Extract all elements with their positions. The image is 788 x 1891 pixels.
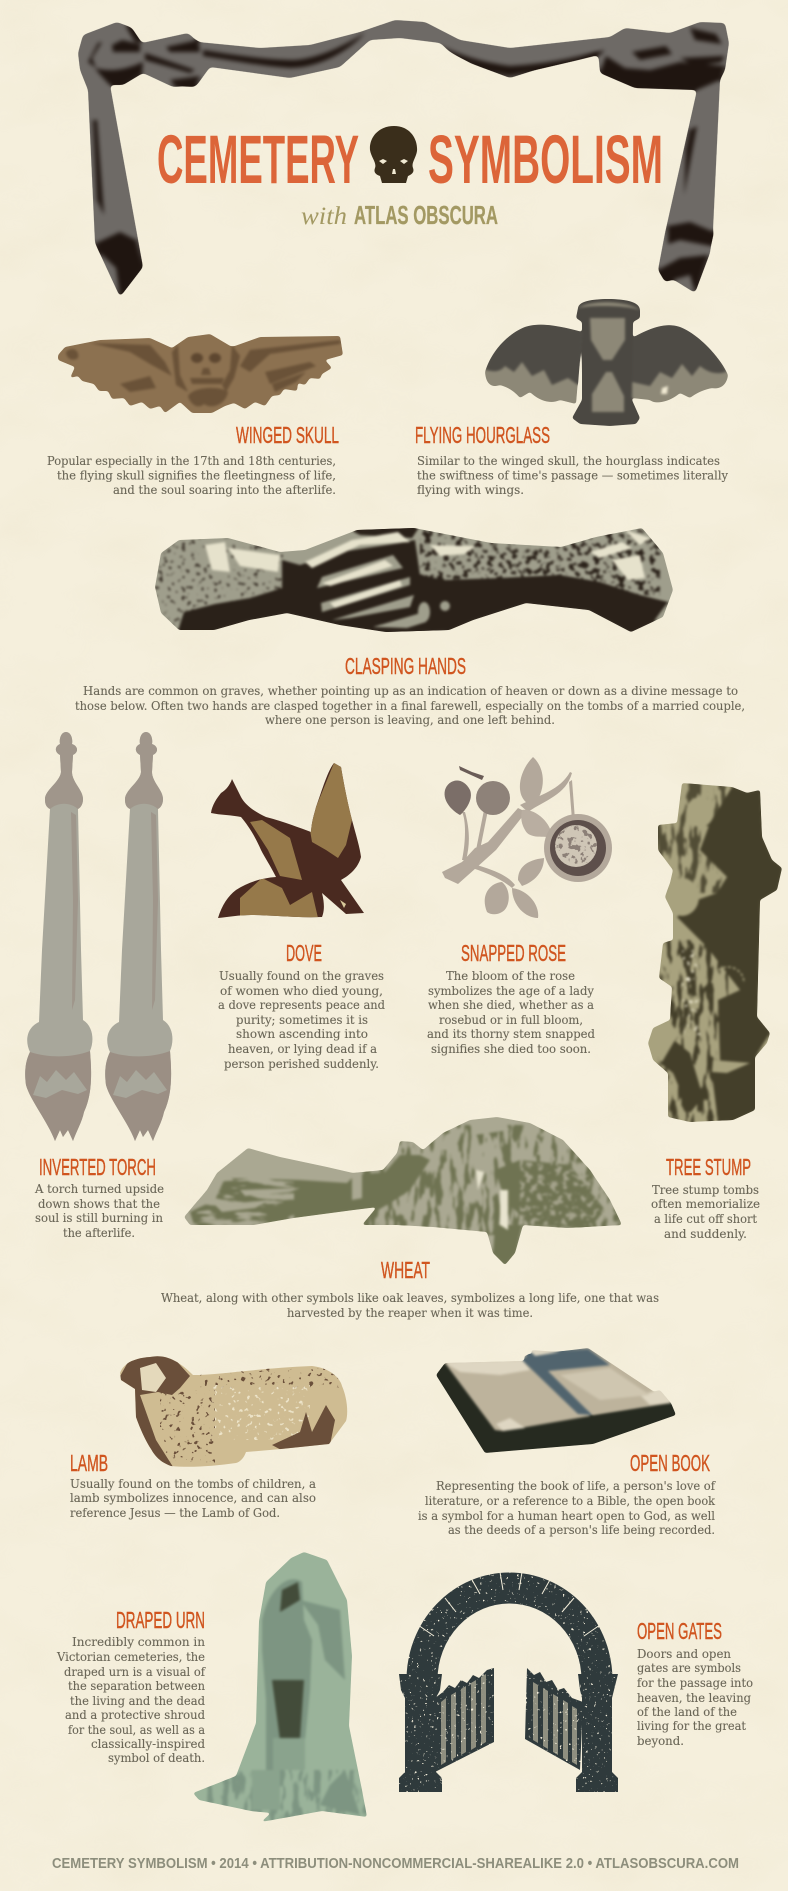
description: beyond. — [637, 1734, 684, 1748]
description: heaven, or lying dead if a — [228, 1042, 377, 1056]
description: Wheat, along with other symbols like oak leaves, symbolizes a long life, one that was — [161, 1291, 659, 1305]
panel: tree stump — [645, 780, 785, 1241]
description: purity; sometimes it is — [236, 1013, 368, 1027]
description: person perished suddenly. — [224, 1057, 379, 1071]
description: and the soul soaring into the afterlife. — [113, 483, 336, 497]
heading: OPEN GATES — [637, 1618, 722, 1644]
panel: lamb — [70, 1350, 350, 1520]
icon: winged skull — [58, 334, 343, 413]
heading: FLYING HOURGLASS — [415, 422, 550, 448]
description: heaven, the leaving — [637, 1691, 751, 1705]
heading: DRAPED URN — [116, 1607, 205, 1633]
heading: LAMB — [70, 1450, 108, 1476]
description: the afterlife. — [63, 1226, 135, 1240]
description: lamb symbolizes innocence, and can also — [70, 1491, 316, 1505]
description: symbolizes the age of a lady — [428, 984, 594, 998]
subtitle — [301, 200, 498, 230]
panel: inverted torch — [25, 732, 172, 1240]
description: the swiftness of time's passage — sometimes literally — [417, 468, 728, 482]
description: of women who died young, — [220, 984, 383, 998]
icon: tree stump — [645, 780, 785, 1125]
footer credit: CEMETERY SYMBOLISM • 2014 • ATTRIBUTION-NONCOMMERCIAL-SHAREALIKE 2.0 • ATLASOBSCURA.COM — [52, 1856, 739, 1872]
description: Victorian cemeteries, the — [56, 1650, 205, 1664]
description — [56, 1635, 206, 1765]
panel: snapped rose — [427, 757, 612, 1056]
heading: WINGED SKULL — [236, 422, 339, 448]
icon: lamb — [120, 1356, 348, 1467]
description: soul is still burning in — [35, 1211, 163, 1225]
description: those below. Often two hands are clasped together in a final farewell, especially on the tombs of a married couple, — [75, 699, 745, 713]
description — [218, 969, 385, 1071]
icon: draped urn — [190, 1550, 370, 1825]
description: and a protective shroud — [65, 1708, 205, 1722]
description: symbol of death. — [108, 1751, 205, 1765]
description: reference Jesus — the Lamb of God. — [70, 1506, 280, 1520]
icon: dove — [211, 763, 364, 918]
description — [70, 1477, 316, 1520]
description — [651, 1183, 760, 1241]
icon: clasping hands — [155, 528, 673, 632]
icon: flying hourglass — [485, 299, 728, 426]
description: the separation between — [68, 1679, 205, 1693]
header — [78, 20, 729, 297]
description — [417, 454, 728, 497]
icon: open gates — [399, 1572, 618, 1792]
title — [157, 121, 663, 198]
description: when she died, whether as a — [428, 998, 594, 1012]
heading: CLASPING HANDS — [345, 653, 466, 679]
panel: open gates — [399, 1572, 753, 1792]
description: Usually found on the graves — [219, 969, 384, 983]
description: of the land of the — [637, 1705, 737, 1719]
description: a life cut off short — [654, 1212, 757, 1226]
description: The bloom of the rose — [446, 969, 575, 983]
panel: clasping hands — [75, 525, 745, 727]
description: Tree stump tombs — [652, 1183, 759, 1197]
description: Incredibly common in — [72, 1635, 205, 1649]
panel: flying hourglass — [415, 299, 728, 497]
description: a dove represents peace and — [218, 998, 385, 1012]
heading: WHEAT — [381, 1257, 430, 1283]
description: classically-inspired — [91, 1737, 205, 1751]
description: the living and the dead — [70, 1694, 205, 1708]
title word left: CEMETERY — [157, 121, 359, 198]
description: where one person is leaving, and one left behind. — [265, 713, 555, 727]
description: Doors and open — [637, 1647, 731, 1661]
ribbon frame — [78, 20, 729, 297]
description: for the soul, as well as a — [68, 1723, 205, 1737]
description — [161, 1291, 659, 1320]
heading: DOVE — [286, 940, 322, 966]
panel: winged skull — [47, 334, 343, 497]
description: living for the great — [637, 1719, 746, 1733]
description: is a symbol for a human heart open to God, as well — [418, 1509, 715, 1523]
description: and its thorny stem snapped — [427, 1027, 595, 1041]
panel: wheat — [161, 1115, 659, 1320]
description: rosebud or in full bloom, — [439, 1013, 583, 1027]
description — [418, 1479, 716, 1537]
description: as the deeds of a person's life being recorded. — [448, 1523, 715, 1537]
description: Popular especially in the 17th and 18th centuries, — [47, 454, 336, 468]
description — [427, 969, 595, 1056]
panel: dove — [205, 760, 385, 1071]
description: often memorialize — [651, 1197, 760, 1211]
description — [47, 454, 336, 497]
panel: draped urn — [56, 1550, 370, 1825]
subtitle: ATLAS OBSCURA — [354, 200, 498, 230]
description: Hands are common on graves, whether pointing up as an indication of heaven or down as a divine message to — [83, 684, 738, 698]
description: signifies she died too soon. — [431, 1042, 591, 1056]
subtitle: with — [301, 203, 347, 230]
description: flying with wings. — [417, 483, 524, 497]
description: Representing the book of life, a person's love of — [436, 1479, 716, 1493]
heading: INVERTED TORCH — [39, 1154, 156, 1180]
description: gates are symbols — [637, 1661, 741, 1675]
panel: open book — [418, 1348, 716, 1537]
description: draped urn is a visual of — [64, 1665, 206, 1679]
description — [34, 1182, 164, 1240]
description: for the passage into — [637, 1676, 753, 1690]
description: down shows that the — [38, 1197, 160, 1211]
icon: wheat sheaf — [180, 1115, 625, 1270]
description: and suddenly. — [664, 1227, 747, 1241]
description — [75, 684, 745, 727]
icon: inverted torches — [25, 732, 172, 1141]
description: the flying skull signifies the fleetingness of life, — [57, 468, 336, 482]
heading: OPEN BOOK — [630, 1450, 710, 1476]
description: Usually found on the tombs of children, a — [70, 1477, 316, 1491]
description — [637, 1647, 753, 1748]
description: shown ascending into — [236, 1027, 368, 1041]
description: literature, or a reference to a Bible, the open book — [425, 1494, 716, 1508]
description: harvested by the reaper when it was time. — [287, 1306, 533, 1320]
description: A torch turned upside — [34, 1182, 164, 1196]
description: Similar to the winged skull, the hourglass indicates — [417, 454, 720, 468]
heading: SNAPPED ROSE — [461, 940, 566, 966]
icon: snapped rose — [442, 757, 612, 918]
icon: skull — [370, 126, 417, 183]
icon: open book — [436, 1348, 676, 1453]
